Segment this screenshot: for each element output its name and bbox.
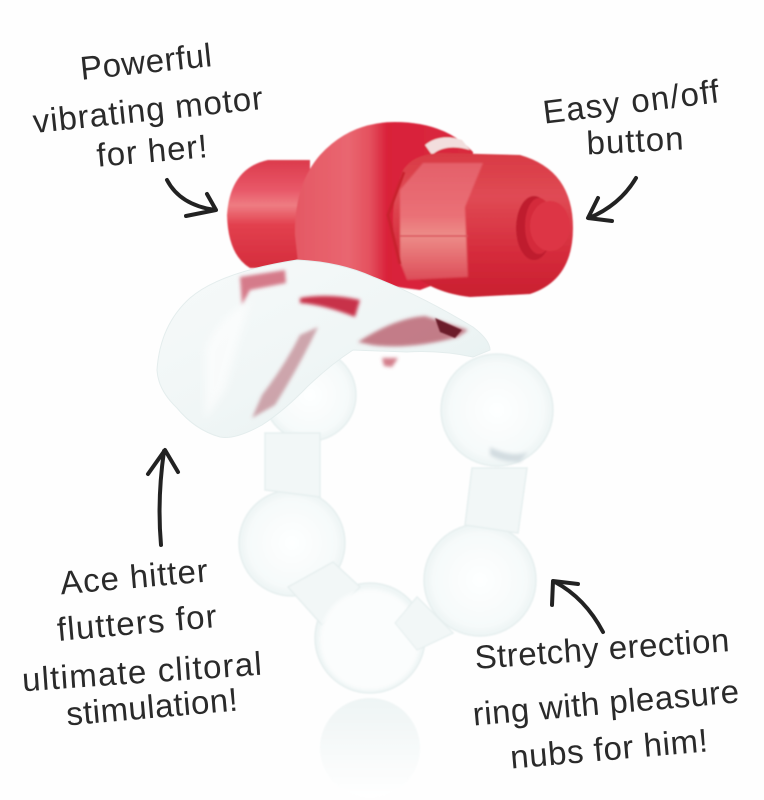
callout: motor (31, 36, 265, 174)
reflection (320, 698, 420, 798)
callout: motor: Powerful (78, 36, 213, 87)
arrow: to ring (552, 581, 603, 632)
left cylinder (227, 160, 310, 268)
callout: ring (471, 621, 740, 776)
cylinder facet (400, 163, 483, 280)
product: clear ace hitter flap (157, 260, 490, 438)
arrow: to ace hitter (148, 450, 178, 545)
arrow: to motor (167, 180, 216, 216)
callout: ace hitter (21, 552, 263, 732)
callout: ring: Stretchy erection (473, 621, 730, 676)
callout: motor: for her! (95, 127, 209, 174)
product: ring with pleasure nubs (239, 349, 553, 798)
callout: button: button (586, 119, 684, 162)
callout: ace hitter: Ace hitter (59, 552, 209, 601)
callout: button: Easy on/off (541, 72, 722, 131)
on/off button (516, 196, 570, 260)
callout: ace hitter: stimulation! (65, 681, 239, 732)
arrow: to button (588, 178, 636, 221)
product: red vibrating motor (227, 122, 573, 297)
ring balls (239, 349, 553, 693)
callout: motor: vibrating motor (31, 79, 265, 140)
ring connectors (265, 433, 527, 650)
central bulge (295, 122, 473, 290)
red reflections (240, 270, 468, 418)
callout: ace hitter: flutters for (55, 597, 218, 648)
right cylinder (393, 153, 573, 297)
callout: ring: nubs for him! (509, 721, 709, 776)
callout: button (541, 72, 722, 162)
callout: ring: ring with pleasure (471, 672, 740, 733)
callout: ace hitter: ultimate clitoral (21, 645, 263, 698)
